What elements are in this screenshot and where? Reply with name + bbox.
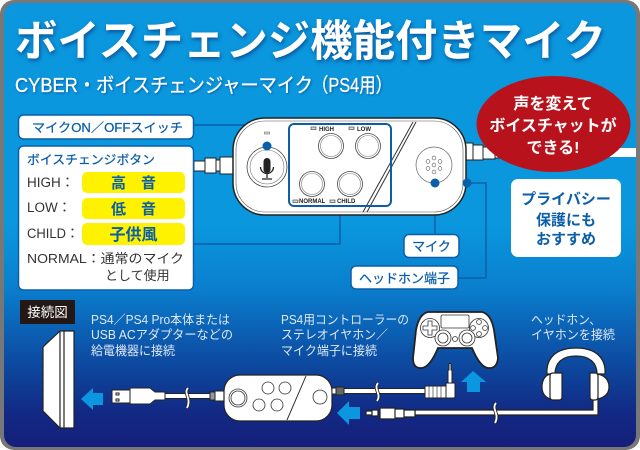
title: ボイスチェンジ機能付きマイク [15, 18, 606, 66]
heading: connection diagram: 接続図 [27, 304, 68, 320]
row: child: 子供風 [109, 226, 158, 244]
text: controller: ステレオイヤホン／ [281, 328, 388, 342]
speaker grille [416, 147, 452, 183]
row: child [27, 223, 185, 245]
row: high: 高 音 [111, 175, 156, 192]
label: headphone jack [351, 266, 458, 289]
button group: HIGH [319, 127, 334, 133]
callout: red ellipse: ボイスチャットが [489, 116, 617, 135]
callout: privacy: 保護にも [536, 211, 596, 229]
text: power source: PS4／PS4 Pro本体または [91, 313, 230, 327]
callout: privacy: おすすめ [536, 231, 596, 248]
label: mic [404, 234, 459, 258]
callout: red ellipse: 声を変えて [513, 94, 593, 113]
icon: console [43, 331, 74, 428]
arrow: to console [81, 388, 103, 410]
leader lines [194, 125, 486, 278]
panel: voice change buttons: ボイスチェンジボタン [27, 153, 155, 167]
text: power source [91, 313, 233, 358]
row: normal: NORMAL：通常のマイク [27, 251, 184, 266]
text: power source: 給電機器に接続 [91, 343, 175, 358]
callout: red ellipse: できる! [526, 139, 580, 157]
slanted groove [363, 122, 416, 212]
text: controller [281, 313, 409, 358]
heading: connection diagram [20, 300, 75, 324]
text: controller: PS4用コントローラーの [281, 313, 409, 327]
subtitle: （PS4用） [312, 74, 392, 97]
arrow: to controller [461, 371, 486, 392]
cable stubs on device [194, 143, 636, 174]
callout: privacy: プライバシー [521, 191, 611, 208]
text: headphones: イヤホンを接続 [531, 327, 615, 342]
icon: controller plug and cable [332, 364, 455, 401]
icon: game controller [413, 312, 498, 368]
text: headphones [531, 313, 615, 342]
label: mic: マイク [412, 239, 451, 254]
row: low: 低 音 [111, 201, 156, 218]
subtitle: CYBER・ボイスチェンジャーマイク [15, 74, 313, 97]
text: headphones: ヘッドホン、 [531, 313, 601, 327]
text: power source: USB ACアダプターなどの [91, 327, 233, 342]
button group: CHILD [337, 199, 356, 205]
label: mic on/off switch: マイクON／OFFスイッチ [32, 121, 183, 135]
label: mic on/off switch [18, 115, 194, 139]
row: normal: として使用 [105, 268, 170, 283]
leader dots [262, 142, 472, 188]
row: high [27, 172, 185, 193]
row: low: LOW： [27, 200, 71, 215]
callout: privacy [511, 179, 621, 257]
device: small controller [224, 375, 332, 421]
row: child: CHILD： [27, 226, 79, 241]
mic button [247, 132, 287, 187]
button group: NORMAL [299, 199, 326, 205]
row: low [27, 198, 185, 219]
icon: headphones and jack [366, 348, 609, 423]
row: normal [27, 251, 184, 283]
arrow: from headphone jack [337, 401, 360, 425]
device: microphone controller [233, 118, 466, 215]
panel: voice change buttons [18, 146, 194, 290]
button group [289, 124, 391, 206]
button group: LOW [357, 127, 371, 133]
text: controller: マイク端子に接続 [281, 343, 377, 358]
row: high: HIGH： [27, 175, 74, 190]
label: headphone jack: ヘッドホン端子 [359, 271, 450, 286]
callout: red ellipse [476, 76, 630, 172]
icon: usb plug and cable [112, 388, 224, 408]
